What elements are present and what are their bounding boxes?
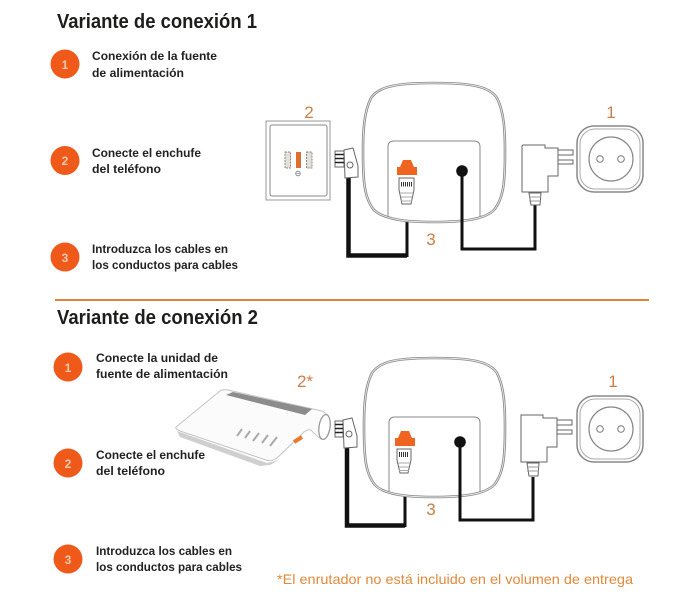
orange network port (395, 431, 415, 446)
step 1 of variant 1: 1 (62, 58, 69, 72)
title: variant 1: Variante de conexión 1 (57, 11, 257, 33)
label 3: 3 (426, 500, 436, 519)
step 3 of variant 1 (50, 242, 238, 272)
wall phone socket (266, 121, 330, 200)
step 1 of variant 1: de alimentación (92, 66, 184, 80)
label 3: 3 (426, 230, 436, 249)
step 2 of variant 2: del teléfono (96, 464, 165, 478)
step 3 of variant 2 (54, 544, 242, 574)
phone cable (347, 447, 405, 526)
step 1 of variant 2: Conecte la unidad de (96, 351, 218, 365)
orange network port (397, 160, 417, 175)
step 2 of variant 1 (50, 146, 201, 176)
step 1 of variant 2: 1 (65, 361, 72, 375)
step 2 of variant 2: 2 (65, 457, 72, 471)
label 1: 1 (608, 372, 618, 391)
base station outline (363, 83, 505, 222)
RJ plug (397, 449, 411, 473)
router (176, 390, 332, 466)
step 3 of variant 2: 3 (65, 553, 72, 567)
phone plug (335, 148, 358, 178)
power port and cable (454, 436, 533, 520)
divider (55, 299, 649, 301)
wall power socket (577, 126, 643, 192)
step 1 of variant 2 (54, 351, 228, 382)
step 3 of variant 1: los conductos para cables (92, 258, 238, 272)
title: variant 2: Variante de conexión 2 (57, 307, 258, 329)
step 1 of variant 1: Conexión de la fuente (92, 49, 217, 63)
power adapter (521, 415, 572, 476)
step 2 of variant 1: 2 (62, 154, 69, 168)
RJ plug (399, 178, 414, 204)
step 2 of variant 1: Conecte el enchufe (92, 146, 201, 160)
phone cable (348, 178, 407, 256)
base station outline (364, 358, 505, 497)
label 2: 2 (304, 103, 314, 122)
wall power socket (577, 396, 643, 462)
step 2 of variant 2: Conecte el enchufe (96, 448, 205, 462)
step 2 of variant 2 (54, 448, 205, 478)
label 1: 1 (606, 103, 616, 122)
step 1 of variant 2: fuente de alimentación (96, 367, 228, 381)
diagram: variant 2 (176, 358, 643, 527)
power port and cable (456, 165, 535, 249)
power adapter (522, 145, 573, 205)
step 3 of variant 2: Introduzca los cables en (96, 544, 232, 558)
step 3 of variant 2: los conductos para cables (96, 560, 242, 574)
step 1 of variant 1 (50, 49, 217, 80)
step 3 of variant 1: Introduzca los cables en (92, 242, 228, 256)
phone plug (335, 418, 357, 448)
step 2 of variant 1: del teléfono (92, 162, 161, 176)
step 3 of variant 1: 3 (62, 251, 69, 265)
label 2*: 2* (297, 372, 313, 391)
diagram: variant 1 (266, 83, 643, 257)
footnote: *El enrutador no está incluido en el volumen de entrega (277, 571, 633, 587)
